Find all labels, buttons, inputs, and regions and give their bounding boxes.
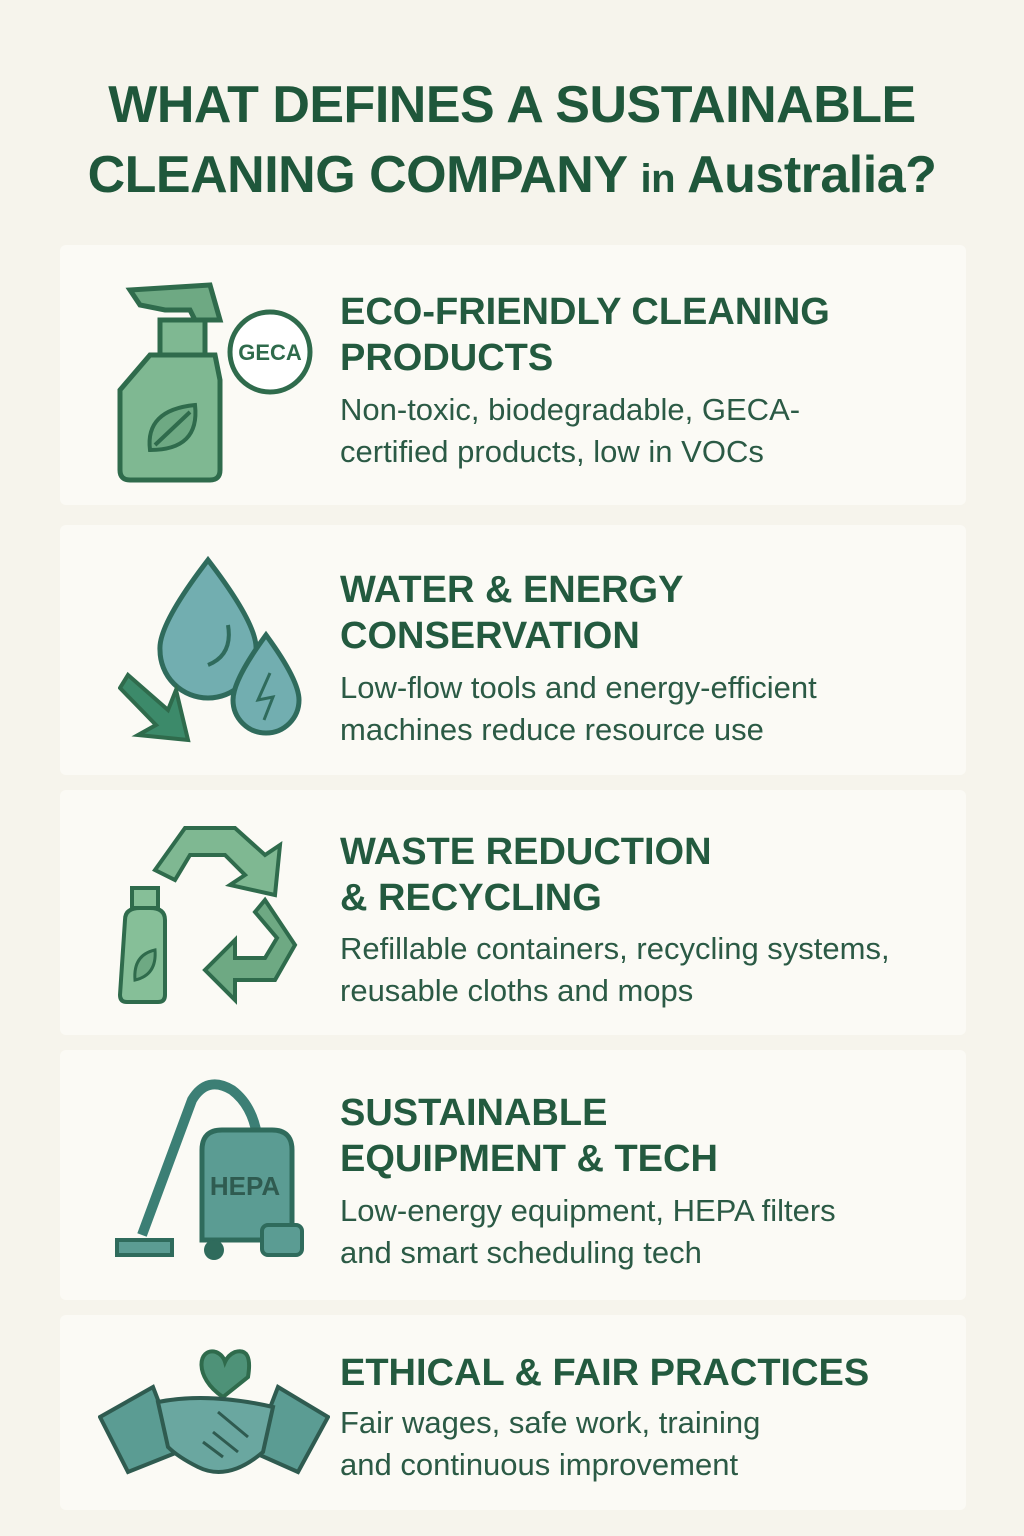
body text <box>340 392 800 469</box>
body text <box>340 931 890 1008</box>
heading: ETHICAL & FAIR PRACTICES <box>340 1352 869 1394</box>
icon: HEPA vacuum <box>115 1079 304 1260</box>
icon: water drops and arrow <box>118 556 302 742</box>
body text: and smart scheduling tech <box>340 1235 702 1270</box>
heading: CONSERVATION <box>340 615 640 657</box>
heading: EQUIPMENT & TECH <box>340 1138 718 1180</box>
panel: ethical practices <box>60 1315 966 1510</box>
heading: PRODUCTS <box>340 337 553 379</box>
heading: & RECYCLING <box>340 877 602 919</box>
icon: handshake with heart <box>98 1349 330 1475</box>
body text: Low-energy equipment, HEPA filters <box>340 1193 836 1228</box>
body text: and continuous improvement <box>340 1447 738 1482</box>
heading <box>340 831 712 919</box>
body text: machines reduce resource use <box>340 712 764 747</box>
title <box>88 76 936 204</box>
body text: Fair wages, safe work, training <box>340 1405 760 1440</box>
body text <box>340 670 817 747</box>
panel: eco-friendly products <box>60 245 966 505</box>
heading: ECO-FRIENDLY CLEANING <box>340 291 830 333</box>
title: WHAT DEFINES A SUSTAINABLE <box>108 76 916 134</box>
body text <box>340 1193 836 1270</box>
body text <box>340 1405 760 1482</box>
heading <box>340 1092 718 1180</box>
body text: Low-flow tools and energy-efficient <box>340 670 817 705</box>
icon: HEPA vacuum: HEPA <box>210 1171 280 1201</box>
body text: Refillable containers, recycling systems, <box>340 931 890 966</box>
panel: water & energy <box>60 525 966 775</box>
heading <box>340 291 830 379</box>
heading: SUSTAINABLE <box>340 1092 607 1134</box>
body text: Non-toxic, biodegradable, GECA- <box>340 392 800 427</box>
heading: WASTE REDUCTION <box>340 831 712 873</box>
icon: spray bottle with GECA badge: GECA <box>238 340 302 365</box>
panel: sustainable equipment <box>60 1050 966 1300</box>
heading: WATER & ENERGY <box>340 569 683 611</box>
heading <box>340 569 683 657</box>
title: CLEANING COMPANY in Australia? <box>88 146 936 204</box>
icon: spray bottle with GECA badge <box>118 282 312 482</box>
panel: waste reduction <box>60 790 966 1035</box>
body text: certified products, low in VOCs <box>340 434 764 469</box>
body text: reusable cloths and mops <box>340 973 693 1008</box>
icon: recycle arrows and bottle <box>118 826 298 1005</box>
